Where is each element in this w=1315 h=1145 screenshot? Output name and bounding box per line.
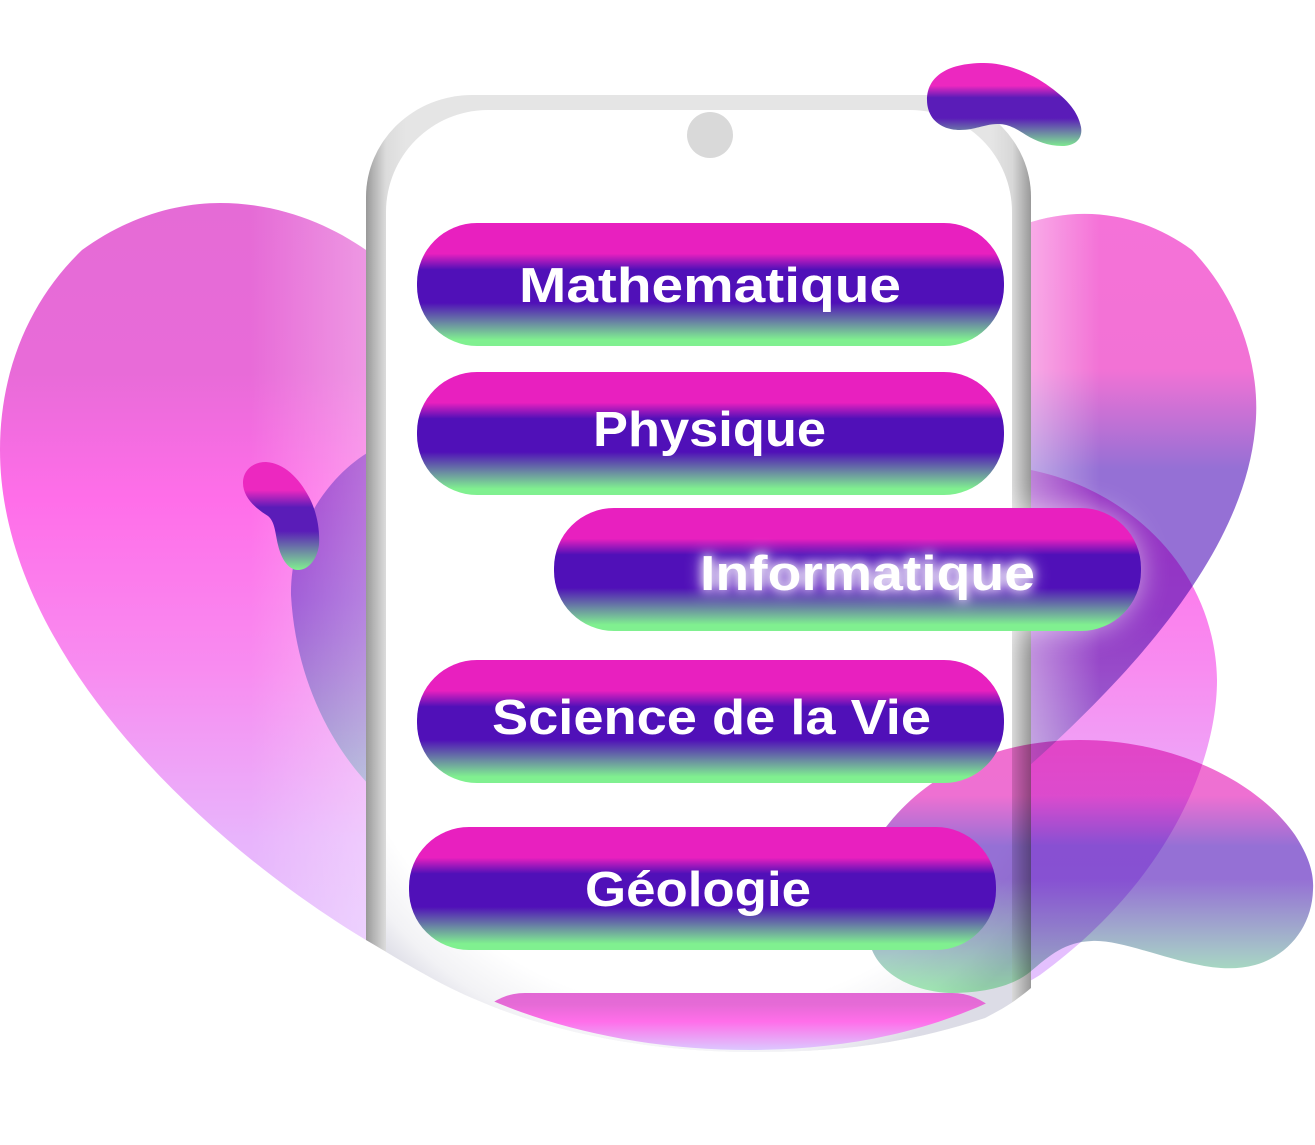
highlight: left of phone <box>272 209 366 940</box>
pill: Géologie <box>409 827 996 950</box>
pill: Physique: Physique <box>593 403 826 457</box>
glow behind Informatique pill <box>554 508 1141 631</box>
blob: small left <box>243 462 319 570</box>
pill: Informatique <box>554 508 1141 631</box>
camera notch <box>687 112 733 158</box>
pill: Informatique: Informatique <box>700 547 1035 601</box>
pill: Science de la Vie: Science de la Vie <box>492 691 931 745</box>
phone frame <box>366 95 1031 1095</box>
pill: Physique <box>417 372 1004 495</box>
pill: Mathematique <box>417 223 1004 346</box>
highlight: right of phone <box>1031 214 1093 764</box>
blob: bottom right translucent <box>865 740 1313 993</box>
pill: Géologie: Géologie <box>585 863 811 917</box>
screen bottom shading <box>386 883 1012 1052</box>
blob: large pink background <box>0 203 1217 1050</box>
blob: right background <box>1025 214 1256 770</box>
blob: left inner purple <box>291 450 372 788</box>
pill: clipped bottom <box>494 993 986 1050</box>
pill: Science de la Vie <box>417 660 1004 783</box>
phone <box>366 95 1031 1095</box>
blob: small top right <box>927 63 1081 146</box>
pill: Mathematique: Mathematique <box>519 259 901 313</box>
phone screen <box>386 110 1012 800</box>
